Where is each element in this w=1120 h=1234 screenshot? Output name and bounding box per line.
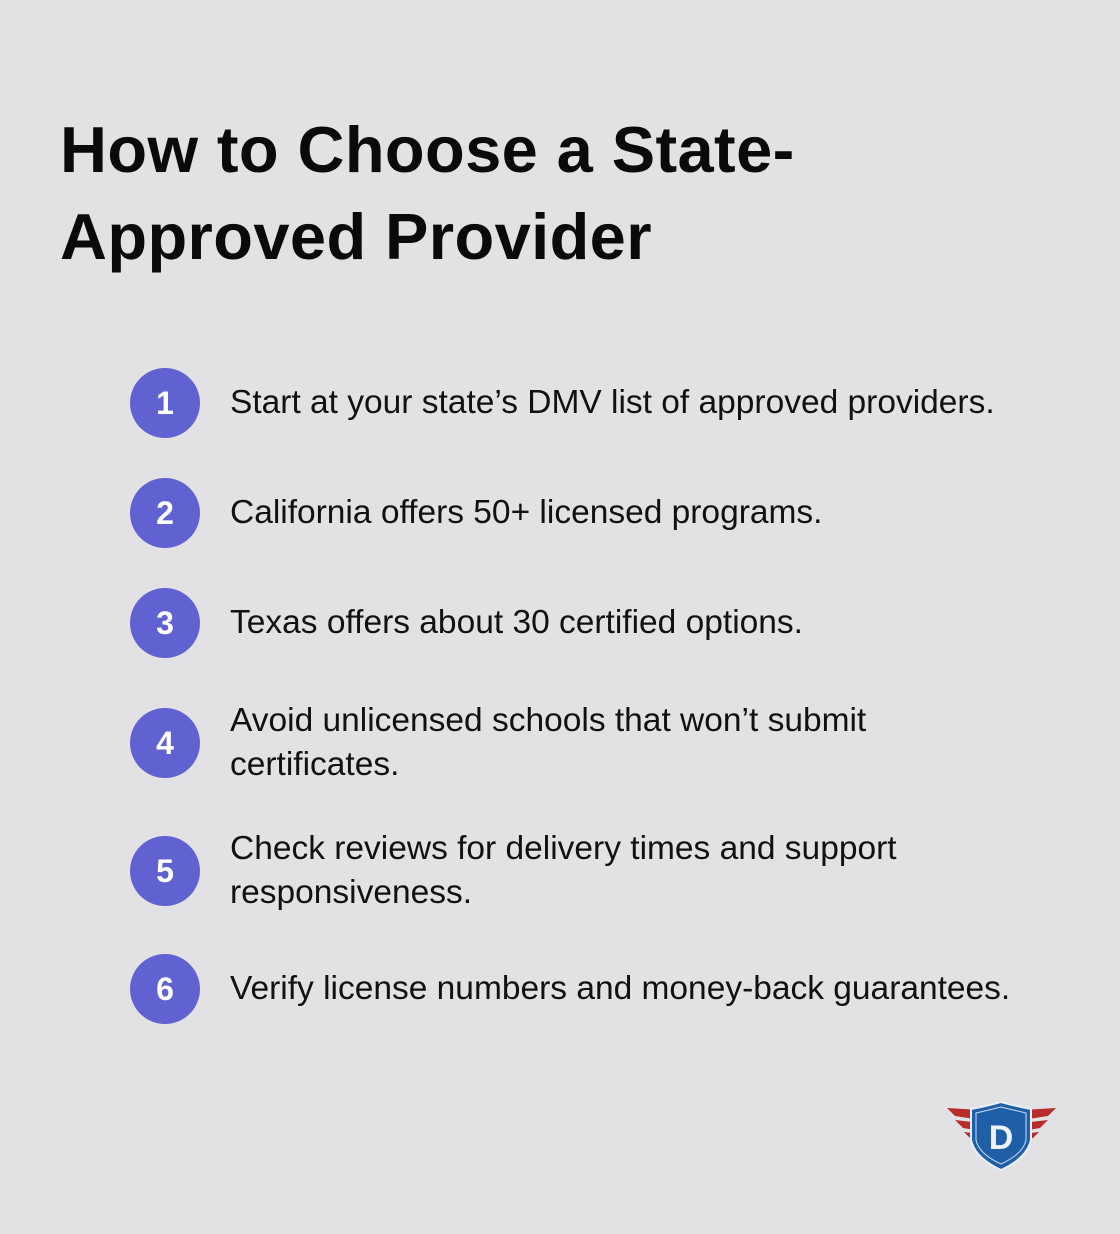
item 3: Texas offers about 30 certified options. xyxy=(230,604,803,641)
item 3: 3 xyxy=(156,605,174,641)
item 1 xyxy=(130,368,995,438)
item 5: 5 xyxy=(156,853,174,889)
logo: D xyxy=(989,1119,1013,1157)
item 5: Check reviews for delivery times and support responsiveness. xyxy=(230,830,897,911)
item 1: Start at your state’s DMV list of approved providers. xyxy=(230,384,995,421)
title: How to Choose a State- xyxy=(60,113,795,186)
title xyxy=(60,113,795,273)
item 2: California offers 50+ licensed programs. xyxy=(230,494,822,531)
item 2: 2 xyxy=(156,495,174,531)
logo xyxy=(947,1101,1056,1171)
item 6: 6 xyxy=(156,971,174,1007)
item 6 xyxy=(130,954,1010,1024)
title: Approved Provider xyxy=(60,200,652,273)
item 2 xyxy=(130,478,822,548)
item 6: Verify license numbers and money-back guarantees. xyxy=(230,970,1010,1007)
item 3 xyxy=(130,588,803,658)
item 1: 1 xyxy=(156,385,174,421)
item 4: Avoid unlicensed schools that won’t submit certificates. xyxy=(230,702,866,783)
item 4: 4 xyxy=(156,725,174,761)
